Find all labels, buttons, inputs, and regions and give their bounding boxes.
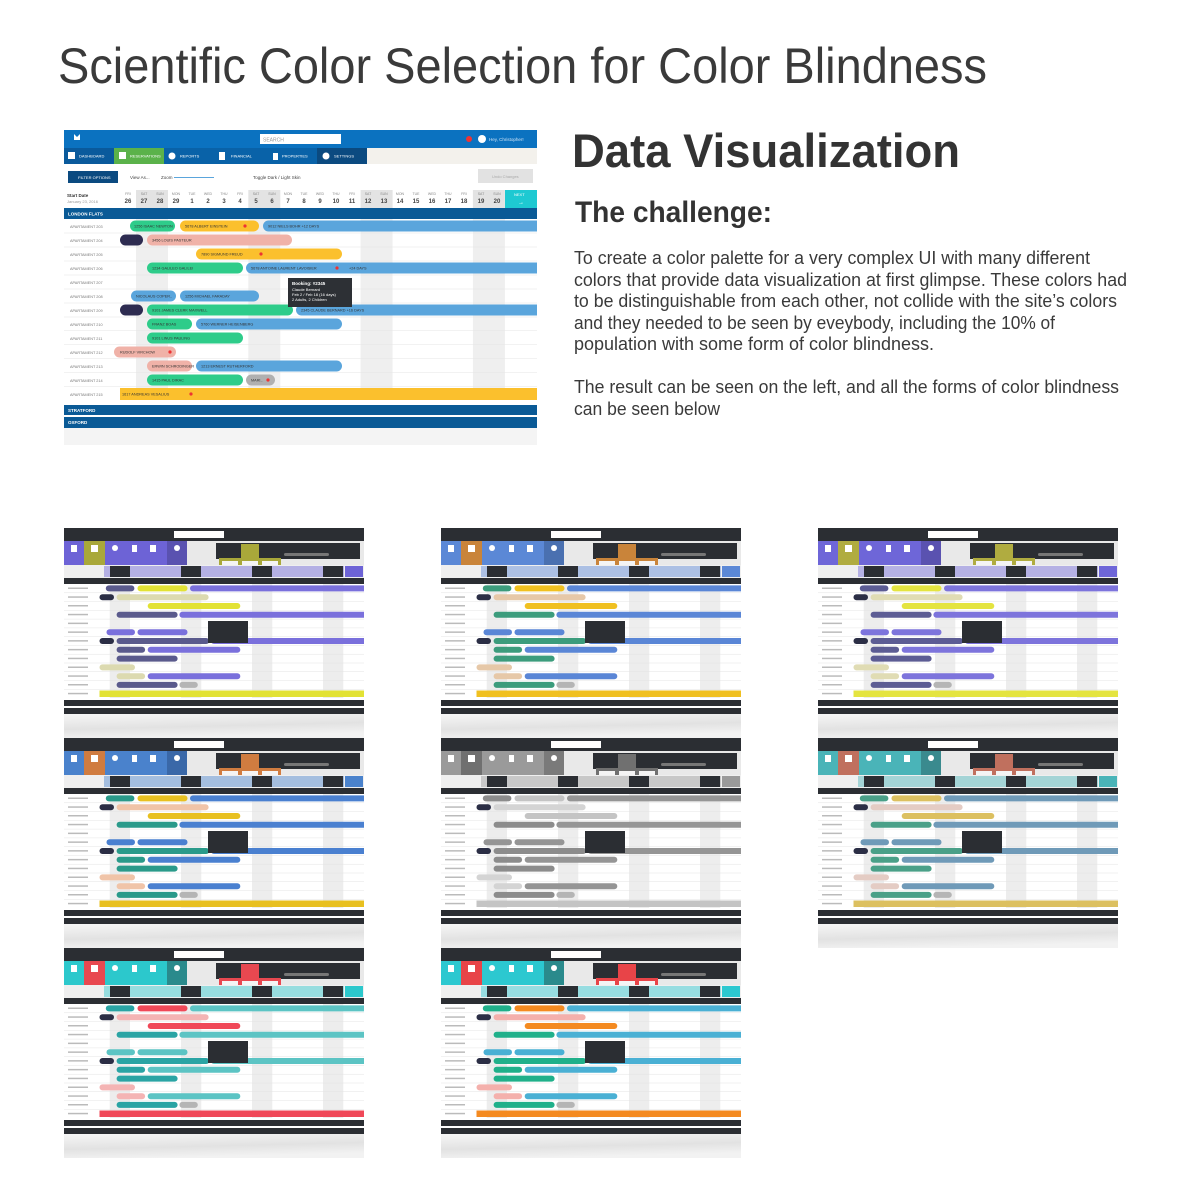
tooltip [288,278,352,307]
date header: January 23, 2016 [67,199,99,204]
date header: 14 [397,199,404,205]
text block: challenge description: to be distinguishable from each other, not collide with the site’s colors [574,291,1117,311]
text block: challenge description: colors that provide data visualization at first glimpse. These colors had [574,270,1127,290]
date header: 9 [318,199,322,205]
date header: SUN [493,192,501,196]
nav bar: PROPERTIES [282,154,308,158]
date header: 29 [173,199,180,205]
booking bars: 9101 JAMES CLERK MAXWELL [152,308,208,312]
date header: 15 [413,199,420,205]
date header: 1 [190,199,194,205]
date header: 3 [222,199,226,205]
booking bars: 7890 SIGMUND FREUD [201,252,243,256]
date header: TUE [412,192,420,196]
date header: 6 [270,199,274,205]
date header: MON [396,192,405,196]
toolbar [68,169,533,183]
panel: main reservation screenshot [64,130,537,445]
date header: SAT [478,192,485,196]
date header: 2 [206,199,210,205]
date header: TUE [300,192,308,196]
tooltip: 2 Adults, 2 Children [292,297,327,302]
reservation grid: APARTAMENT 203 [70,225,103,229]
date header: FRI [125,192,131,196]
tooltip: Booking: #2345 [292,281,326,286]
date header: THU [332,192,340,196]
text block: challenge description: population with some form of color blindness. [574,334,934,354]
panel: color blindness simulation 1 [64,528,364,738]
date header: Start Date [67,193,89,198]
booking bars: 3456 LOUIS PASTEUR [152,238,192,242]
date header: 19 [478,199,485,205]
heading: Data Visualization: Data Visualization [572,124,960,177]
booking bars: ERWIN SCHRODINGER [152,364,194,368]
reservation grid: APARTAMENT 209 [70,309,103,313]
group bars: Stratford and Oxford [64,405,537,428]
date header: SAT [365,192,372,196]
reservation grid: APARTAMENT 207 [70,281,103,285]
text block: challenge description: and they needed to be seen by eveybody, including the 10% of [574,313,1056,333]
tooltip: Feb 2 / Feb 18 (16 days) [292,292,336,297]
date header: 5 [254,199,258,205]
date header [67,190,537,208]
reservation grid: APARTAMENT 204 [70,239,103,243]
panel: color blindness simulation 6 [818,738,1118,948]
booking bars: 1256 ISAAC NEWTON [134,224,173,228]
reservation grid: APARTAMENT 214 [70,379,103,383]
booking bars: 5760 WERNER HEISENBERG [201,322,253,326]
date header: 18 [461,199,468,205]
booking bars [114,220,546,400]
panel: color blindness simulation 2 [441,528,741,738]
booking bars: 2345 CLAUDE BERNARD +16 DAYS [301,308,365,312]
nav bar: SETTINGS [334,154,354,158]
booking bars: NICOLAUS COPER.. [136,294,172,298]
date header: WED [316,192,325,196]
tooltip: Claude Bernard [292,287,320,292]
title: Scientific Color Selection for Color Blindness [58,38,987,94]
reservation grid: APARTAMENT 211 [70,337,102,341]
date header: 26 [125,199,132,205]
group bars: Stratford and Oxford: OXFORD [68,420,88,425]
toolbar: Zoom [161,175,173,180]
text block: challenge description: The result can be seen on the left, and all the forms of color blindness [574,377,1119,397]
reservation grid: APARTAMENT 206 [70,267,103,271]
toolbar: FILTER OPTIONS [78,175,111,180]
date header: THU [220,192,228,196]
booking bars: 1415 PAUL DIRAC [152,378,184,382]
toolbar: Toggle Dark / Light Skin [253,175,301,180]
panel: color blindness simulation 8 [441,948,741,1158]
nav bar [64,148,537,164]
toolbar: View As... [130,175,150,180]
booking bars: 5678 ANTOINE LAURENT LAVOISIER [251,266,317,270]
date header: SUN [156,192,164,196]
group bars: Stratford and Oxford: STRATFORD [68,408,96,413]
date header: MON [284,192,293,196]
group bar: London Flats: LONDON FLATS [68,212,103,216]
booking bars: MARI.. [251,378,263,382]
reservation grid: APARTAMENT 215 [70,393,103,397]
top bar: SEARCH [263,138,284,144]
date header: 12 [365,199,372,205]
nav bar: FINANCIAL [231,154,253,158]
booking bars: FRANZ BOAS [152,322,177,326]
reservation grid [64,219,546,400]
text block: challenge description: To create a color palette for a very complex UI with many different [574,248,1090,268]
booking bars: 1617 ANDREAS VESALIUS [122,392,170,396]
date header: FRI [349,192,355,196]
nav bar: REPORTS [180,154,200,158]
date header: THU [444,192,452,196]
date header: → [518,200,524,206]
booking bars: +24 DAYS [349,266,367,270]
date header: 20 [494,199,501,205]
top bar [64,130,537,148]
group bar: London Flats [64,208,537,219]
date header: SAT [253,192,260,196]
date header: SUN [380,192,388,196]
date header: SAT [141,192,148,196]
booking bars: 9101 LINUS PAULING [152,336,190,340]
date header: FRI [461,192,467,196]
date header: 10 [333,199,340,205]
date header: WED [204,192,213,196]
date header: 16 [429,199,436,205]
date header: 13 [381,199,388,205]
text block: challenge description [574,248,1127,419]
reservation grid: APARTAMENT 210 [70,323,103,327]
date header: 17 [445,199,452,205]
date header: FRI [237,192,243,196]
panel: color blindness simulation 5 [441,738,741,948]
date header: MON [172,192,181,196]
booking bars: 9012 NIELS BOHR +12 DAYS [268,224,320,228]
date header: 28 [157,199,164,205]
panel: color blindness simulation 4 [64,738,364,948]
reservation grid: APARTAMENT 205 [70,253,103,257]
date header: 8 [302,199,306,205]
top bar: Hey, Christopher! [489,137,524,142]
panel: color blindness simulation 7 [64,948,364,1158]
nav bar: RESERVATIONS [130,154,161,158]
date header: 27 [141,199,148,205]
reservation grid: APARTAMENT 208 [70,295,103,299]
date header: 11 [349,199,356,205]
panel: color blindness simulation 3 [818,528,1118,738]
toolbar: Undo Changes [492,174,519,179]
date header: NEXT [514,192,525,197]
reservation grid: APARTAMENT 212 [70,351,103,355]
date header: WED [428,192,437,196]
date header: SUN [268,192,276,196]
date header: 7 [286,199,290,205]
date header: 4 [238,199,242,205]
booking bars: 1256 MICHAEL FARADAY [185,294,230,298]
booking bars: 5678 ALBERT EINSTEIN [185,224,228,228]
reservation grid: APARTAMENT 213 [70,365,103,369]
booking bars: 1234 GALILEO GALILEI [152,266,193,270]
nav bar: DASHBOARD [79,154,104,158]
booking bars: RUDOLF VIRCHOW [120,350,155,354]
date header: TUE [188,192,196,196]
heading: The challenge: The challenge: [575,196,772,229]
text block: challenge description: can be seen below [574,399,721,419]
booking bars: 1213 ERNEST RUTHERFORD [201,364,254,368]
